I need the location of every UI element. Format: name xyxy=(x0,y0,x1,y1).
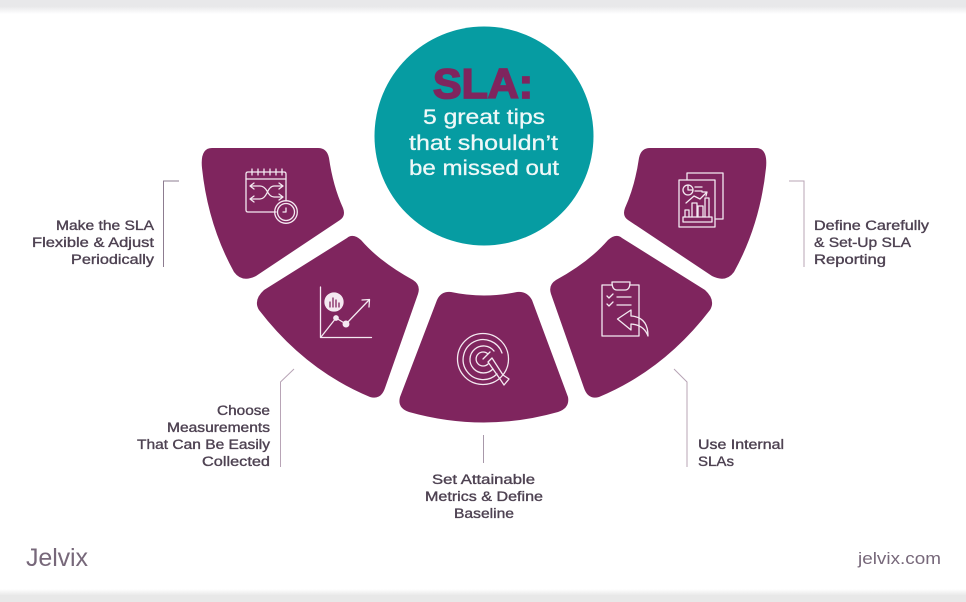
panel: tip 1 flexible xyxy=(202,148,344,279)
label: tip 2 xyxy=(137,403,270,469)
subtitle: that shouldn’t xyxy=(409,132,558,155)
label: tip 3: Metrics & Define xyxy=(425,489,543,504)
label: tip 1: Flexible & Adjust xyxy=(32,235,154,250)
label: tip 3: Set Attainable xyxy=(432,472,535,487)
icon: clipboard with return arrow xyxy=(602,282,648,336)
subtitle xyxy=(409,106,559,180)
label: tip 2: That Can Be Easily xyxy=(137,437,270,452)
label: tip 5: & Set-Up SLA xyxy=(814,235,911,250)
subtitle: be missed out xyxy=(409,157,559,180)
label: tip 1 xyxy=(32,218,154,267)
panel: tip 2 measurements xyxy=(257,236,419,398)
panel: tip 5 reporting xyxy=(624,148,766,279)
logo: Jelvix: Jelvix xyxy=(26,544,88,572)
icon: line chart with rising arrow xyxy=(320,287,372,338)
label: tip 5 xyxy=(814,218,929,267)
heading: SLA: SLA: xyxy=(433,60,533,107)
panel: tip 3 metrics xyxy=(399,292,568,422)
icon: target with arrow xyxy=(458,334,509,385)
label: tip 4: SLAs xyxy=(698,454,734,469)
leader line: tip 2 xyxy=(280,369,294,467)
label: tip 2: Collected xyxy=(202,454,270,469)
label: tip 2: Measurements xyxy=(167,420,270,435)
website: jelvix.com: jelvix.com xyxy=(857,549,941,568)
label: tip 4: Use Internal xyxy=(698,437,784,452)
label: tip 1: Make the SLA xyxy=(56,218,154,233)
label: tip 2: Choose xyxy=(217,403,270,418)
icon: report sheets with charts xyxy=(679,173,723,227)
leader line: tip 1 xyxy=(164,181,179,267)
leader line: tip 5 xyxy=(789,181,804,267)
label: tip 4 xyxy=(698,437,784,469)
leader line: tip 4 xyxy=(674,369,687,467)
label: tip 5: Define Carefully xyxy=(814,218,929,233)
subtitle: 5 great tips xyxy=(423,106,545,129)
label: tip 3 xyxy=(425,472,543,521)
label: tip 5: Reporting xyxy=(814,252,886,267)
title circle xyxy=(374,26,594,246)
panel: tip 4 internal SLAs xyxy=(550,236,712,398)
label: tip 1: Periodically xyxy=(71,252,154,267)
leader line: tip 3 xyxy=(482,435,484,463)
icon: calendar with shuffle arrows and clock xyxy=(246,169,297,223)
label: tip 3: Baseline xyxy=(454,506,514,521)
